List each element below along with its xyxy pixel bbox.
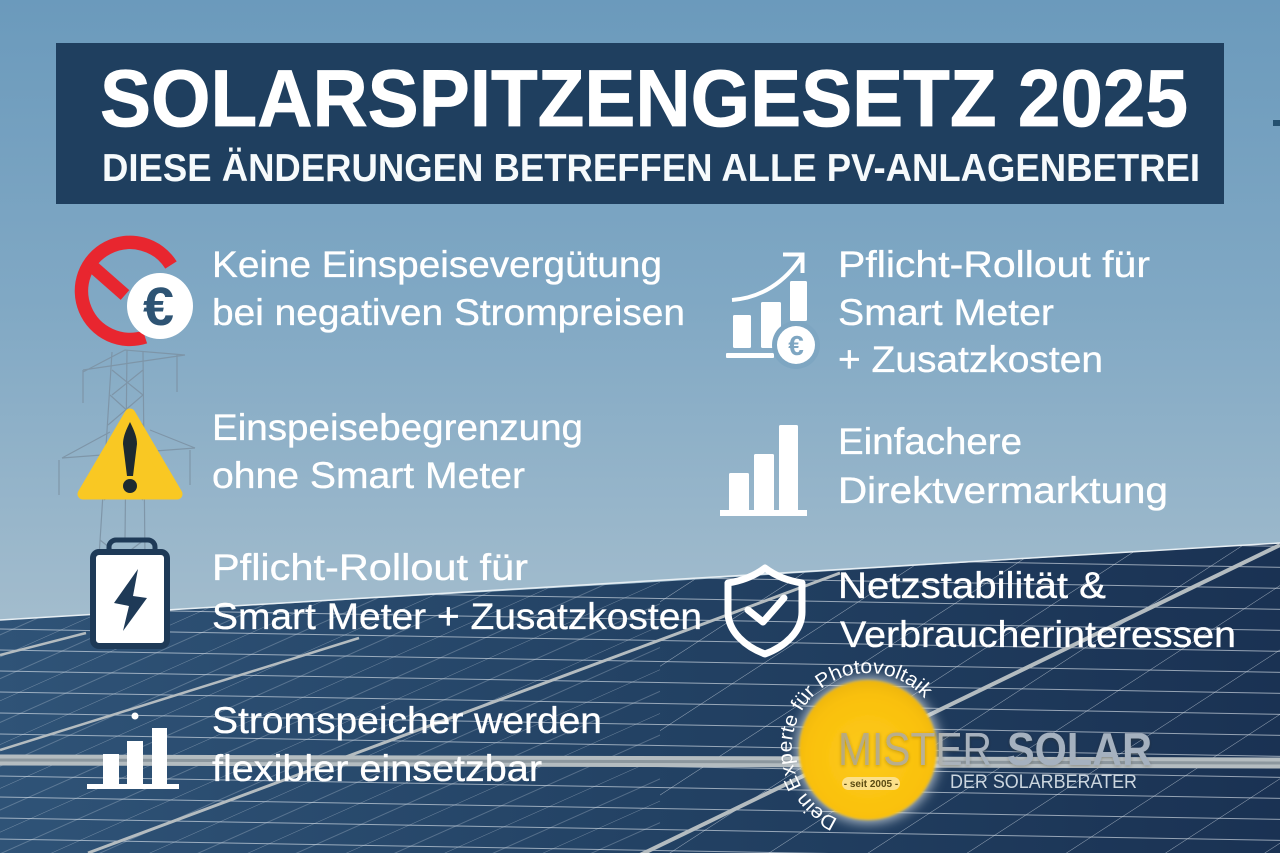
text: ohne Smart Meter [212, 455, 525, 496]
sun disc [796, 677, 940, 823]
text: Netzstabilität & [838, 565, 1106, 606]
item: Einfachere Direktvermarktung [720, 421, 1168, 516]
curved slogan: Dein Experte für Photovoltaik [780, 660, 932, 831]
subtitle: DIESE ÄNDERUNGEN BETREFFEN ALLE PV-ANLAGENBETREI [102, 147, 1200, 190]
title: SOLARSPITZENGESETZ 2025 [100, 54, 1188, 144]
item: Stromspeicher [87, 700, 602, 789]
text: flexibler einsetzbar [212, 748, 542, 789]
text: + Zusatzkosten [838, 339, 1103, 380]
text: Smart Meter + Zusatzkosten [212, 596, 702, 637]
icon: no euro sign: € [143, 277, 174, 337]
icon: battery with lightning [93, 540, 167, 646]
icon: no euro sign [81, 242, 193, 339]
text: bei negativen Strompreisen [212, 292, 685, 333]
item: Pflicht-Rollout rechts [726, 244, 1150, 380]
since badge: - seit 2005 - [844, 779, 898, 790]
text: Verbraucherinteressen [840, 614, 1236, 655]
small dark mark at right edge [1273, 120, 1280, 126]
icon: warning triangle [83, 414, 177, 494]
item: Einspeisebegrenzung [83, 407, 583, 496]
text: Smart Meter [838, 292, 1054, 333]
logo: Mister Solar: SOLAR [1007, 723, 1152, 775]
header banner [56, 43, 1224, 204]
logo: Mister Solar [780, 660, 1152, 832]
text: Pflicht-Rollout für [838, 244, 1150, 285]
item: Keine Einspeisevergütung [81, 242, 685, 339]
icon: rising chart with euro: € [788, 330, 804, 361]
icon: rising chart with euro [726, 254, 820, 369]
text: Keine Einspeisevergütung [212, 244, 662, 285]
item: Pflicht-Rollout links [93, 540, 702, 646]
wordmark: MISTER [838, 723, 992, 775]
icon: shield with check [728, 568, 802, 654]
text: Einfachere [838, 421, 1022, 462]
item: Netzstabilität [728, 565, 1236, 655]
pylon [59, 350, 195, 620]
tagline: DER SOLARBERATER [950, 772, 1137, 793]
icon: bar chart [720, 425, 807, 516]
text: Einspeisebegrenzung [212, 407, 583, 448]
text: Pflicht-Rollout für [212, 547, 528, 588]
text: Stromspeicher werden [212, 700, 602, 741]
text: Direktvermarktung [838, 470, 1168, 511]
icon: small bar chart [87, 712, 179, 789]
